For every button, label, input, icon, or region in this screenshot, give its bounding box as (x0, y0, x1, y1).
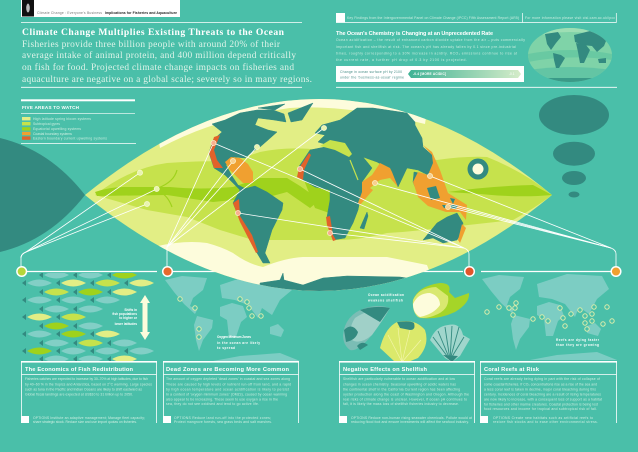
panel: fish redistribution: Global fiscal landings are expected at US$10 to 31 billion up to 2050. (25, 392, 133, 396)
coral markers (485, 301, 614, 331)
ocean chemistry text: important fish and shellfish at risk. The ocean's pH has already fallen by 0.1 since pre-industrial (336, 45, 516, 49)
shell: dark fan (430, 324, 470, 362)
key findings strip: Key Findings from the Intergovernmental Panel on Climate Change (IPCC) Fifth Assessment Report (AR5) (347, 16, 519, 20)
panel: coral reefs: for fisheries and other marine creatures. Coastal protection is being lost (484, 402, 598, 406)
panel: dead zones: by high ocean temperature and ocean acidification is likely to persist (166, 388, 289, 392)
coral caption (556, 338, 600, 347)
coastal orange (225, 145, 467, 243)
panel: coral reefs: Coral Reefs at Risk (484, 367, 540, 373)
header tab: Implications for Fisheries and Aquaculture (105, 11, 177, 15)
legend: five areas to watch: Equatorial upwelling systems (33, 127, 81, 131)
fish eye (468, 158, 488, 180)
panel: dead zones: OPTIONS Reduce land run-off into the protected zones; (174, 416, 271, 420)
panel: fish redistribution: Fisheries catches are expected to increase by 30–70% at high latitudes, due to fish (25, 377, 148, 381)
shell: scallop (380, 321, 426, 362)
panel: dead zones: sea, they do not see oxidised and tend to go active life. (166, 402, 259, 406)
title and intro: Fisheries provide three billion people with around 20% of their (22, 39, 281, 50)
panel: fish redistribution (21, 361, 157, 424)
shift caption: to higher or (119, 316, 138, 320)
panel: coral reefs: century. Incidences of coral bleaching are a result of rising temperatures (484, 392, 601, 396)
shell: mussel (343, 306, 390, 350)
panel: shellfish: changes in ocean chemistry. Seasonal upwelling of acidic waters has (343, 382, 456, 386)
panel: coral reefs: are now likely to increase, with a consequent loss of support as a habitat (484, 398, 602, 402)
fish-shaped world map (85, 99, 552, 291)
shift caption: lower latitudes (115, 322, 137, 326)
shift caption (112, 308, 138, 326)
panel: shellfish: Shellfish are particularly vulnerable to ocean acidification and at low (343, 377, 456, 381)
legend: five areas to watch: Coastal boundary systems (33, 132, 72, 136)
panel: dead zones: In a context of 'oxygen minimum zones' (OMZs), caused by ocean warming (166, 392, 287, 396)
arrow: fish shift (140, 295, 150, 340)
panel: coral reefs: restore fish stocks and to ease other environmental stress. (493, 420, 598, 424)
panel: shellfish: OPTIONS Reduce non-human rising seawater chemicals. Pollute would at (351, 416, 472, 420)
panel: shellfish: oyster production along the coast of Washington and Oregon. Although the (343, 392, 469, 396)
panel: shellfish: real risks of climate change is unclear. However, if ocean pH continues to (343, 398, 467, 402)
panel: fish redistribution: The Economics of Fish Redistribution (25, 367, 134, 373)
panel: fish redistribution: by 40–60 % in the tropics and Antarctica, based on 2°C warming. Large species (25, 382, 152, 386)
ocean chemistry text (336, 31, 525, 62)
top cream band (159, 99, 426, 148)
header tab (21, 0, 180, 17)
legend: five areas to watch: FIVE AREAS TO WATCH (22, 105, 80, 110)
panel: dead zones (163, 361, 299, 424)
coral caption: than they are growing (556, 343, 599, 347)
current arrow (158, 170, 177, 207)
acidity bar callout (336, 66, 617, 87)
shift caption: Shifts in (124, 308, 137, 312)
bottom cream band (158, 242, 429, 291)
mini globe (528, 28, 612, 82)
acidity bar callout: -0.1 (509, 72, 515, 76)
panel: shellfish: the continental shelf in the California Current region has been affecting (343, 388, 460, 392)
eastern boundary red (209, 135, 336, 253)
dead zones world map (165, 275, 300, 361)
acidity bar callout: Change in ocean surface pH by 2100 (340, 70, 402, 74)
panel: fish redistribution: share strategic stock. Reduce size and use import quotas on fisheries. (33, 420, 137, 424)
Mediterranean lime patch (320, 140, 352, 157)
legend: five areas to watch (21, 99, 136, 144)
acidity bar callout: -0.4 [MORE ACIDIC] (413, 72, 446, 76)
dead zone caption: to spread (217, 346, 235, 350)
panel: coral reefs: some coastal fisheries. If CO₂ concentrations rise as a rise of the sea and (484, 382, 597, 386)
panel: dead zones: These are caused by high levels of nutrient run-off from land, and a rapid (166, 382, 291, 386)
panel: dead zones: also appear to be increasing. These seem to use oxygen a rise in the (166, 398, 278, 402)
dead zone markers (178, 297, 263, 339)
title and intro: on fish for food. Projected climate change impacts on fisheries and (22, 62, 294, 73)
panel: dead zones: Protect mangrove forests, sea grass beds and salt marshes. (174, 420, 272, 424)
hub icons (17, 267, 621, 276)
title and intro: Climate Change Multiplies Existing Threats to the Ocean (22, 27, 285, 38)
legend: five areas to watch: Subtropical gyres (33, 122, 60, 126)
title and intro (21, 22, 312, 87)
panel: dead zones: The amount of oxygen depleted 'dead zones' in coastal and sea zones along (166, 377, 290, 381)
ocean chemistry text: The Ocean's Chemistry is Changing at an Unprecedented Rate (336, 31, 493, 37)
title and intro: average intake of animal protein, and 400 million depend critically (22, 50, 296, 61)
map marker dots (137, 125, 451, 236)
panel: coral reefs (480, 361, 617, 424)
dead zone caption (217, 335, 260, 350)
acidity bar callout: under the 'business-as-usual' regime (340, 76, 404, 80)
shift caption: fish populations (112, 312, 137, 316)
ocean chemistry text: the current rate, a further pH drop of 0.3 by 2100 is projected. (336, 58, 467, 62)
connector lines (21, 128, 616, 266)
land (209, 103, 463, 300)
panel: shellfish: fall, it is likely the mass loss of shellfish fisheries industry to decrease. (343, 402, 459, 406)
panel: shellfish (339, 361, 475, 424)
legend: five areas to watch: High latitude spring bloom systems (33, 117, 91, 121)
panel: fish redistribution: such as tuna in the Pacific and Indian Oceans are likely to shift eastward as (25, 388, 142, 392)
hub lines (26, 270, 611, 272)
panel: shellfish: Negative Effects on Shellfish (343, 367, 428, 373)
equatorial band left (95, 178, 320, 208)
panel: coral reefs: food resources and income for tropical and subtropical risk of fall. (484, 407, 597, 411)
fish tail (0, 138, 85, 252)
key findings strip (336, 13, 616, 22)
ocean chemistry text: times, roughly corresponding to a 30% increase in acidity. RCO₂ emissions continue to rise at (336, 52, 517, 56)
panel: dead zones: Dead Zones are Becoming More Common (166, 367, 290, 373)
panel: shellfish: reducing flood foot and ensure investments will affect the seafood industry. (351, 420, 469, 424)
dead zone caption: Oxygen Minimum Zones (217, 335, 251, 339)
fish eye bubbles (539, 95, 609, 198)
key findings strip: For more information please visit cisl.cam.ac.uk/ipcc (525, 16, 615, 20)
header tab: Climate Change : Everyone's Business (37, 11, 102, 15)
shell caption: Ocean acidification (368, 293, 404, 297)
ocean chemistry text: Ocean acidification – the result of enhanced carbon dioxide uptake from the air – puts commercially (336, 38, 525, 42)
shell caption (367, 293, 404, 302)
shell caption: weakens shellfish (367, 298, 403, 302)
panel: coral reefs: Coral reefs are already being dying in part with the risk of collapse of (484, 377, 600, 381)
coral caption: Reefs are dying faster (556, 338, 600, 342)
title and intro: aquaculture are negative on a global scale; severely so in many regions. (22, 75, 312, 85)
legend: five areas to watch: Eastern boundary current upwelling systems (33, 136, 107, 140)
fish shoal (22, 272, 154, 362)
coral world map (482, 274, 617, 360)
panel: coral reefs: OPTIONS Create new habitats such as artificial reefs to (493, 416, 593, 420)
subtropical gyre (95, 148, 552, 240)
panel: coral reefs: a less coral reef is taken in decline, major coral bleaching during this (484, 388, 596, 392)
panel: fish redistribution: OPTIONS Institute an adaptive management; Manage fleet capacity; (33, 416, 145, 420)
island detail (427, 186, 458, 209)
dead zone caption: in the ocean are likely (217, 341, 260, 345)
shell: open oyster (413, 283, 469, 318)
equatorial band right (448, 185, 552, 196)
